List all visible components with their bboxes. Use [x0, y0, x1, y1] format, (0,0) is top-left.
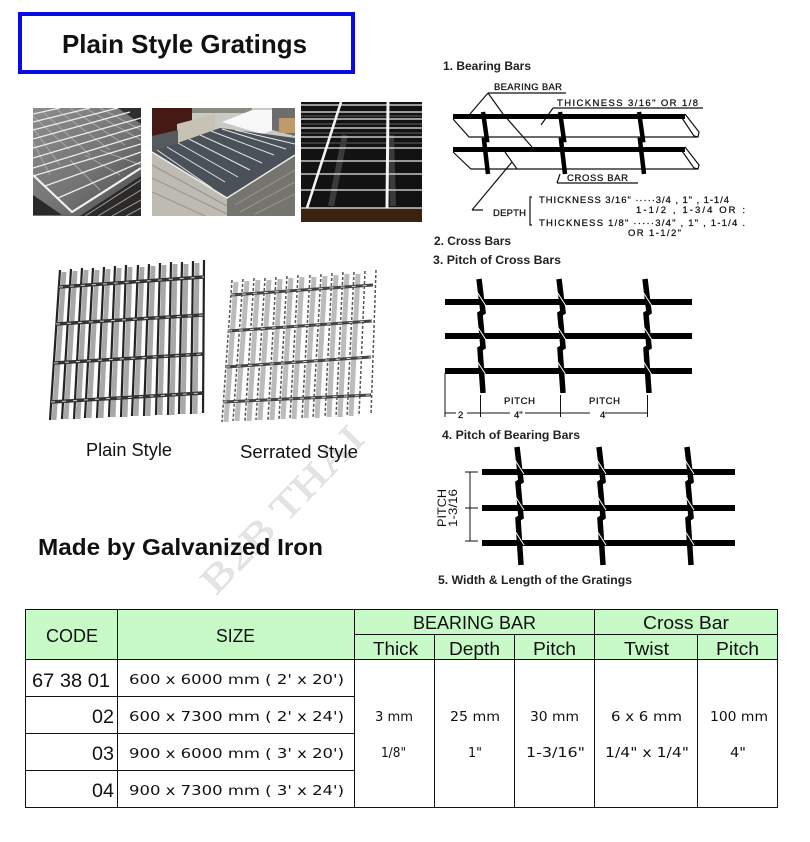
code column [32, 671, 114, 802]
caption: plain style: Plain Style [86, 440, 172, 460]
diagram: bearing bars and cross bars: BEARING BAR [494, 82, 562, 93]
table header labels: Twist [624, 639, 669, 659]
code column: 02 [92, 707, 114, 728]
heading: 1. bearing bars: 1. Bearing Bars [443, 61, 531, 73]
bar specification values: 6 x 6 mm [611, 709, 682, 725]
diagram: bearing bars and cross bars: THICKNESS 3/16" ·····3/4 , 1" , 1-1/4 [539, 195, 729, 206]
table grid [26, 610, 778, 808]
diagram: bearing bars and cross bars [453, 82, 745, 239]
photo: close-up of serrated grating [301, 102, 422, 222]
diagram: bearing bars and cross bars: CROSS BAR [567, 173, 628, 184]
table header labels [46, 613, 759, 659]
bar specification values [375, 709, 768, 761]
size column: 600 x 7300 mm ( 2' x 24') [129, 709, 344, 725]
table header labels: Depth [449, 639, 500, 659]
title box [20, 14, 353, 72]
size column: 600 x 6000 mm ( 2' x 20') [129, 672, 344, 688]
table header background [26, 610, 778, 660]
diagram: pitch of bearing bars: PITCH [435, 489, 449, 527]
heading: 2. cross bars: 2. Cross Bars [434, 236, 511, 248]
illustration: serrated style grating [222, 270, 376, 422]
table header labels: SIZE [216, 626, 255, 646]
heading: 3. pitch of cross bars: 3. Pitch of Cross Bars [433, 255, 561, 267]
specification table [26, 610, 778, 808]
illustration: plain style grating [50, 260, 204, 420]
diagram: bearing bars and cross bars: DEPTH [493, 208, 526, 219]
code column: 03 [92, 744, 114, 765]
diagram: pitch of cross bars [445, 279, 692, 421]
heading: 5. width and length: 5. Width & Length of the Gratings [438, 575, 632, 587]
diagram: bearing bars and cross bars: OR 1-1/2" [628, 228, 681, 239]
table header labels: BEARING BAR [413, 613, 536, 633]
diagram: bearing bars and cross bars: 1-1/2 , 1-3/4 OR : [636, 205, 745, 216]
caption: serrated style: Serrated Style [240, 442, 358, 462]
size column: 900 x 7300 mm ( 3' x 24') [129, 783, 344, 799]
diagram: bearing bars and cross bars: THICKNESS 1/8" ·····3/4" , 1" , 1-1/4 . [539, 218, 745, 229]
table header labels: Pitch [533, 639, 576, 659]
watermark: B2B THAI [192, 418, 373, 602]
photo: grating panel angled view [33, 108, 141, 216]
bar specification values: 25 mm [450, 709, 500, 725]
bar specification values: 3 mm [375, 709, 413, 725]
diagram: pitch of cross bars: PITCH [504, 396, 535, 407]
bar specification values: 4" [730, 745, 746, 761]
diagram: pitch of cross bars: 4" [514, 410, 523, 421]
bar specification values: 1-3/16" [526, 745, 585, 761]
size column: 900 x 6000 mm ( 3' x 20') [129, 746, 344, 762]
diagram: pitch of cross bars: PITCH [589, 396, 620, 407]
code column: 04 [92, 781, 114, 802]
size column [129, 672, 344, 799]
material note: Made by Galvanized Iron [38, 534, 323, 560]
diagram: pitch of bearing bars: 1-3/16 [446, 489, 460, 527]
photo: stacked gratings [152, 108, 295, 216]
bar specification values: 1/8" [381, 745, 406, 761]
diagram: pitch of bearing bars [435, 447, 735, 565]
heading: 4. pitch of bearing bars: 4. Pitch of Bearing Bars [442, 430, 580, 442]
bar specification values: 1" [468, 745, 482, 761]
bar specification values: 1/4" x 1/4" [605, 745, 689, 761]
table header labels: Pitch [716, 639, 759, 659]
bar specification values: 30 mm [530, 709, 579, 725]
title box: Plain Style Gratings [62, 29, 307, 59]
table header labels: Cross Bar [643, 613, 729, 633]
bar specification values: 100 mm [710, 709, 768, 725]
diagram: pitch of cross bars: 4 [600, 410, 605, 421]
diagram: pitch of cross bars: 2 [458, 410, 463, 421]
code column: 67 38 01 [32, 671, 110, 692]
diagram: bearing bars and cross bars: THICKNESS 3/16" OR 1/8 [557, 98, 698, 109]
table header labels: Thick [373, 639, 419, 659]
table header labels: CODE [46, 626, 98, 646]
